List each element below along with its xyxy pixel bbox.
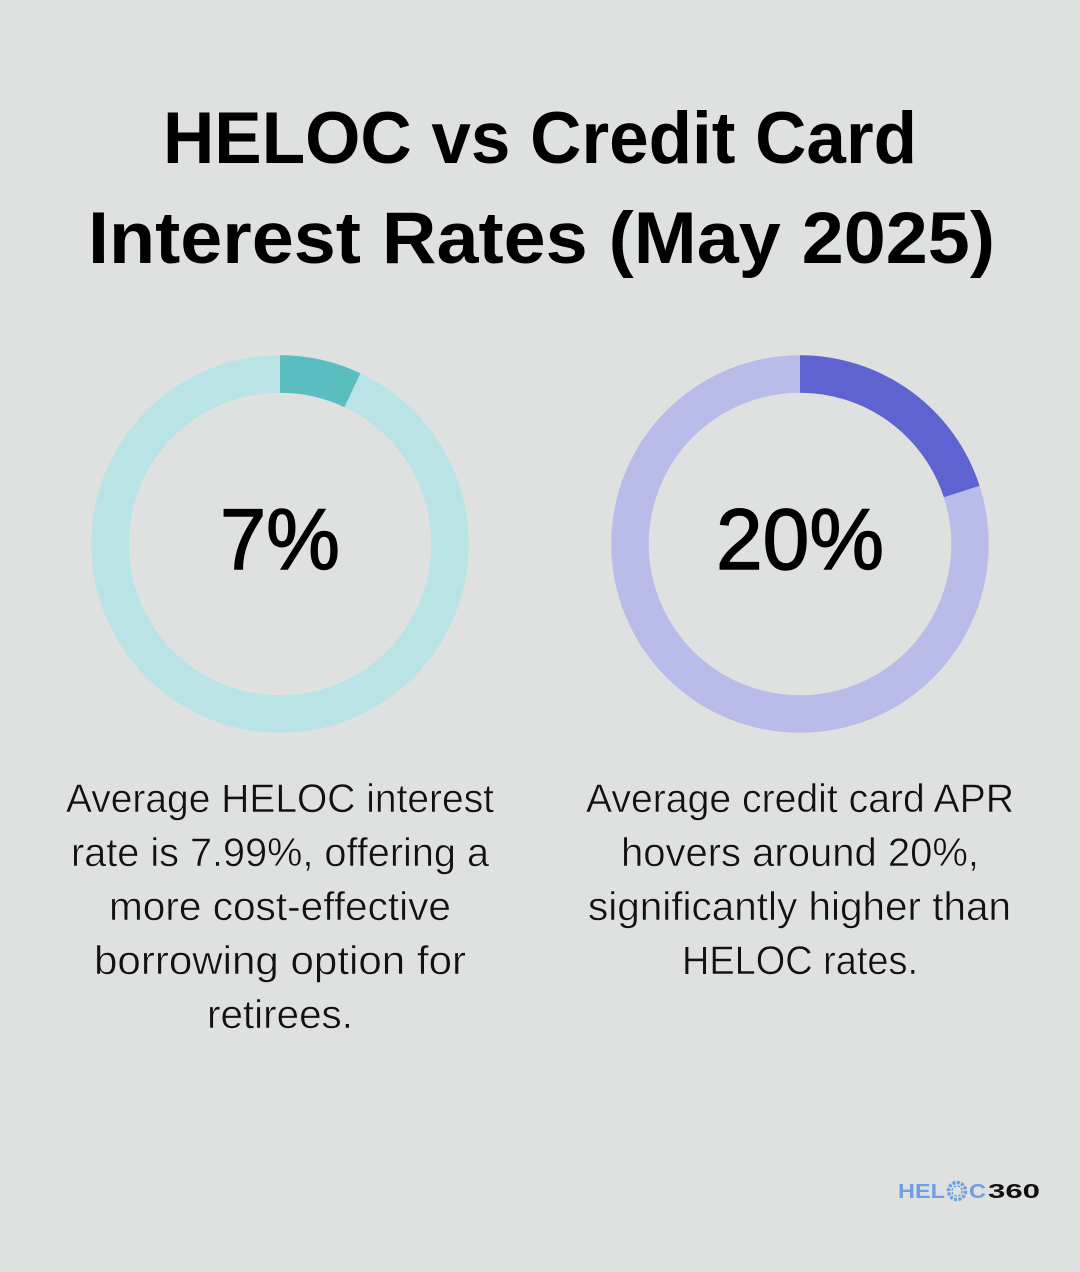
donut chart: 7% (110, 374, 450, 714)
icon: spiral O (948, 1182, 966, 1200)
description: HELOC rate: more cost-effective (109, 885, 451, 929)
logo: HELOC360 (898, 1180, 1040, 1203)
description: credit card APR: Average credit card APR (586, 777, 1014, 821)
description: HELOC rate: retirees. (207, 993, 353, 1037)
description: credit card APR: HELOC rates. (682, 939, 918, 983)
logo: HELOC360: 360 (988, 1180, 1040, 1203)
description: HELOC rate: borrowing option for (94, 939, 466, 983)
description: HELOC rate: Average HELOC interest (66, 777, 494, 821)
value: 20%: 20% (716, 492, 884, 588)
description: HELOC rate: rate is 7.99%, offering a (71, 831, 490, 875)
title: Interest Rates (May 2025) (88, 198, 995, 279)
title (88, 98, 995, 279)
title: HELOC vs Credit Card (163, 98, 917, 179)
logo: HELOC360: C (969, 1180, 986, 1203)
donut chart: 20% (630, 374, 970, 714)
description: HELOC rate (66, 777, 494, 1037)
description: credit card APR (586, 777, 1014, 983)
panel: credit card APR (586, 374, 1014, 983)
panel: HELOC rate (66, 374, 494, 1037)
logo: HELOC360: HEL (898, 1180, 945, 1203)
description: credit card APR: significantly higher than (588, 885, 1011, 929)
description: credit card APR: hovers around 20%, (621, 831, 979, 875)
value: 7%: 7% (220, 492, 340, 588)
